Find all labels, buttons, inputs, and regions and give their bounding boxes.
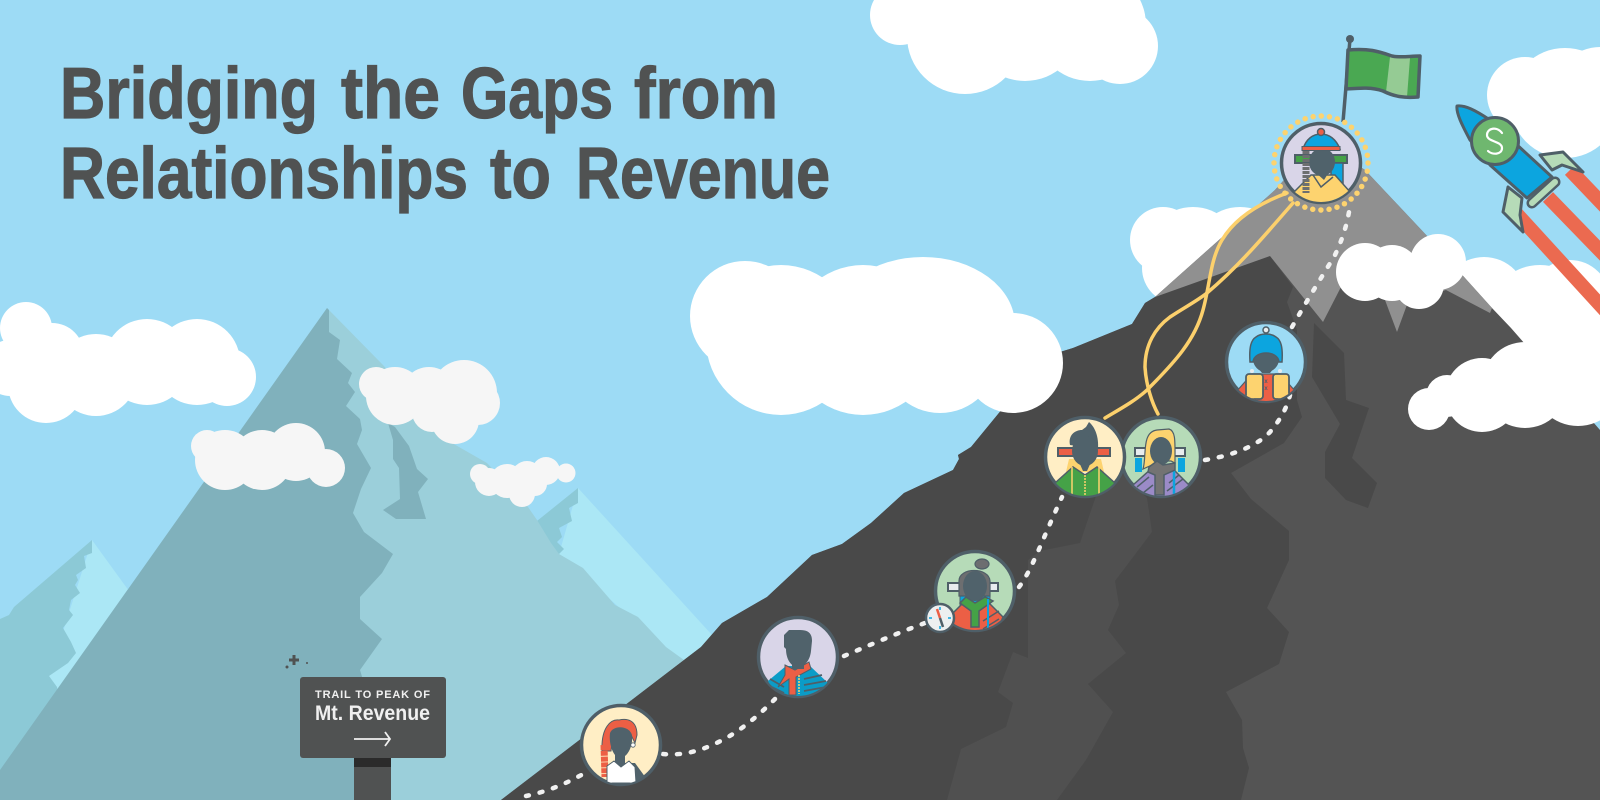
avatar: blue beanie hiker: x	[1264, 379, 1268, 385]
title: Revenue	[576, 134, 830, 214]
cloud: top right behind rocket	[1487, 47, 1600, 158]
cloud: front right	[1408, 315, 1600, 432]
avatar: woman with red braid	[582, 706, 660, 785]
cloud: left white	[0, 302, 256, 423]
title: from	[634, 54, 778, 134]
title: Gaps	[461, 54, 613, 134]
avatar: blue beanie hiker: x	[1264, 386, 1268, 392]
sign: trail to peak	[300, 677, 446, 800]
avatar: woman with hair bun	[936, 552, 1014, 631]
rocket lower fin	[1503, 187, 1523, 232]
cloud: front of summit	[1336, 234, 1466, 309]
sign main text: Mt. Revenue	[315, 702, 430, 725]
title: to	[490, 134, 551, 214]
small mountain: left	[0, 540, 150, 800]
rocket	[1457, 106, 1600, 318]
cloud: small grey on central mountain	[191, 423, 345, 490]
main mountain	[501, 140, 1600, 800]
cloud: behind summit right	[1441, 257, 1600, 390]
title: Bridging	[60, 54, 318, 134]
yellow rope lines	[1105, 193, 1293, 418]
sign small text: TRAIL TO PEAK OF	[315, 689, 430, 701]
cloud: grey at central peak	[359, 360, 500, 444]
icon: compass	[926, 604, 954, 632]
sign arrow	[354, 732, 390, 746]
title	[60, 54, 830, 214]
flag on summit	[1343, 35, 1420, 122]
rocket body	[1457, 106, 1552, 198]
trail: dotted route	[526, 212, 1349, 796]
avatar: peak hiker	[1274, 116, 1368, 210]
avatar: blue beanie hiker	[1226, 322, 1306, 404]
central mountain	[0, 308, 684, 800]
title: the	[341, 54, 440, 134]
rocket badge	[1472, 118, 1518, 164]
cloud: top centre	[870, 0, 1158, 94]
cloud: large centre	[690, 257, 1063, 415]
avatar: woman with blonde hair	[1122, 418, 1200, 499]
cloud: behind summit left	[1130, 207, 1288, 304]
title: Relationships	[60, 134, 468, 214]
avatar: man in striped jacket	[758, 618, 838, 699]
avatar: man with green jacket	[1046, 418, 1124, 499]
cloud: tiny grey	[470, 457, 576, 507]
sparkles near sign	[286, 655, 308, 668]
rocket upper fin	[1540, 152, 1583, 172]
small mountain: right	[537, 488, 712, 665]
rocket base band	[1532, 182, 1555, 203]
